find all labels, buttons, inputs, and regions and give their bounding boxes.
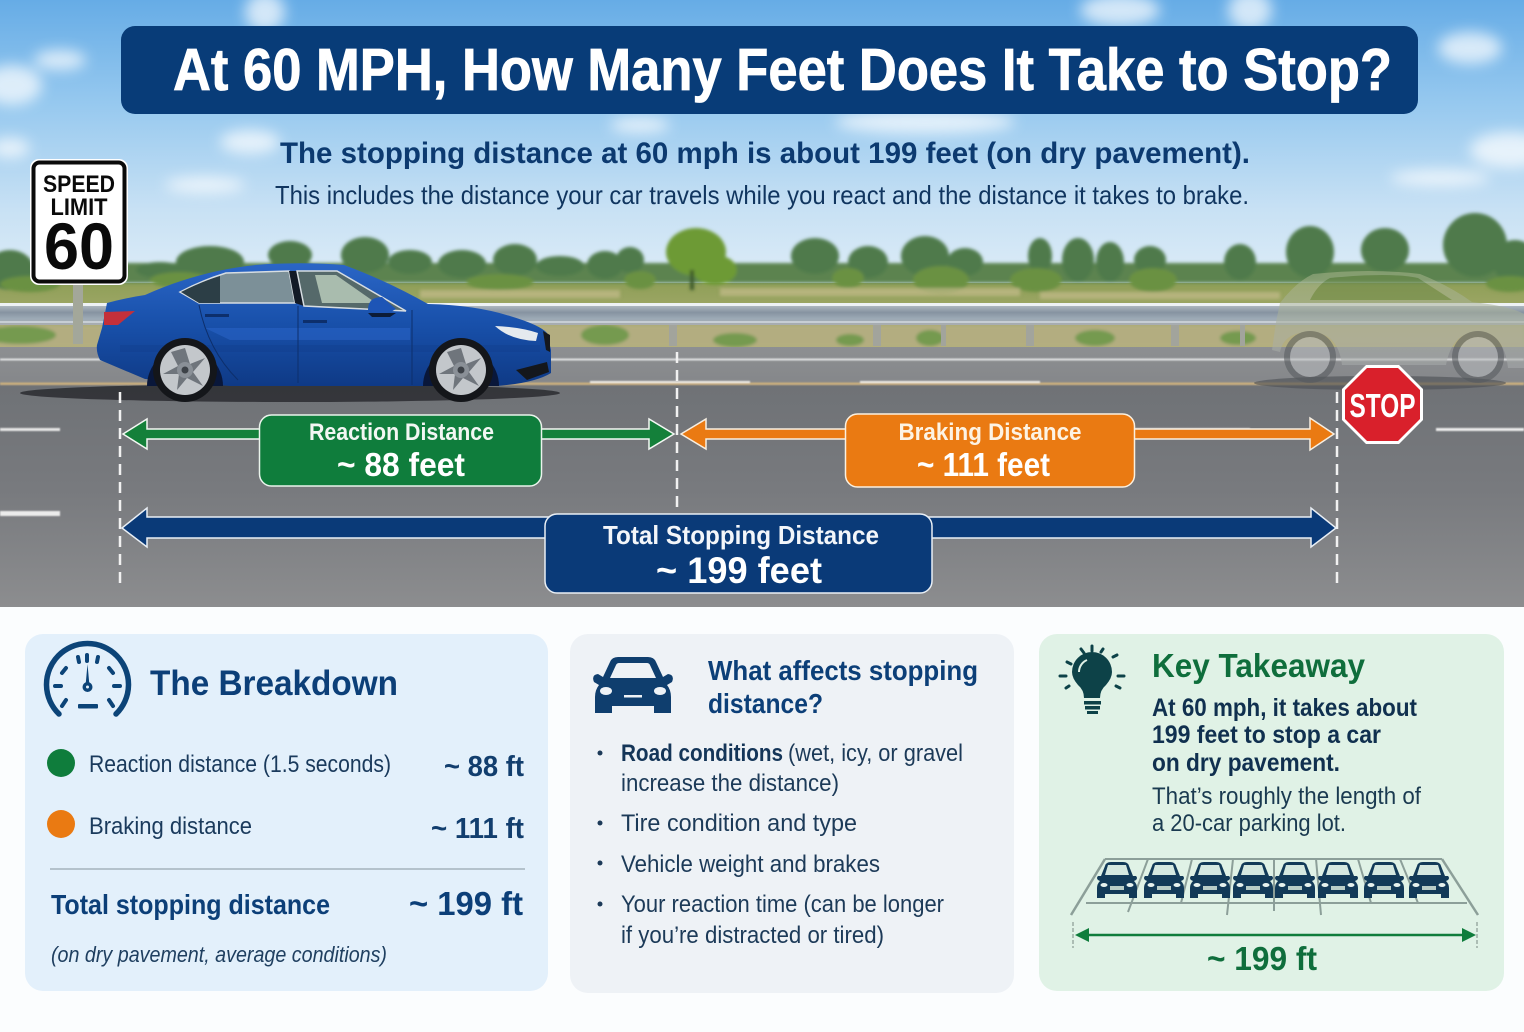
row: braking distance: Braking distance bbox=[89, 813, 252, 840]
heading: what affects stopping distance bbox=[708, 655, 978, 719]
speed limit sign: 60 bbox=[44, 209, 114, 283]
reaction distance arrow and label bbox=[123, 415, 674, 486]
bullet list: increase the distance) bbox=[621, 770, 839, 797]
takeaway text: a 20-car parking lot. bbox=[1152, 810, 1346, 837]
heading: key takeaway: Key Takeaway bbox=[1152, 647, 1366, 684]
ghost car at stopping point bbox=[1254, 271, 1524, 390]
row: reaction distance: Reaction distance (1.5 seconds) bbox=[89, 751, 391, 778]
row: braking distance: ~ 111 ft bbox=[431, 813, 524, 845]
blue car bbox=[20, 263, 560, 402]
page background bbox=[0, 607, 1524, 1032]
bullet list: if you’re distracted or tired) bbox=[621, 922, 884, 949]
takeaway text: That’s roughly the length of bbox=[1152, 783, 1421, 810]
stop sign: STOP bbox=[1350, 387, 1416, 424]
photo scene: sky, trees and road bbox=[0, 0, 1524, 607]
subtitle: This includes the distance your car travels while you react and the distance it takes to brake. bbox=[275, 180, 1249, 210]
icon: car front bbox=[593, 657, 673, 713]
row: reaction distance: ~ 88 ft bbox=[444, 751, 524, 783]
row: total stopping distance: Total stopping distance bbox=[51, 889, 330, 920]
bullet list: Vehicle weight and brakes bbox=[621, 851, 880, 878]
note: (on dry pavement, average conditions) bbox=[51, 942, 387, 967]
reaction distance arrow and label: Reaction Distance bbox=[309, 419, 494, 446]
takeaway text: 199 feet to stop a car bbox=[1152, 721, 1381, 749]
length label: ~ 199 ft bbox=[1207, 940, 1317, 977]
total stopping distance arrow and label: Total Stopping Distance bbox=[603, 520, 879, 550]
panel: what affects stopping distance bbox=[570, 634, 1014, 993]
dashed distance markers bbox=[120, 352, 1337, 587]
takeaway text bbox=[1152, 694, 1421, 837]
icon: speedometer bbox=[46, 644, 128, 714]
heading: what affects stopping distance: What affects stopping bbox=[708, 655, 978, 686]
panel: the breakdown bbox=[25, 634, 548, 991]
subtitle: The stopping distance at 60 mph is about 199 feet (on dry pavement). bbox=[280, 137, 1250, 170]
stop sign bbox=[1342, 365, 1423, 444]
takeaway text: on dry pavement. bbox=[1152, 749, 1340, 777]
speed limit sign bbox=[30, 159, 128, 344]
takeaway text: At 60 mph, it takes about bbox=[1152, 694, 1418, 722]
parking lot illustration bbox=[1071, 859, 1478, 915]
heading: the breakdown: The Breakdown bbox=[150, 664, 398, 703]
bullet list bbox=[598, 740, 963, 949]
total stopping distance arrow and label bbox=[122, 508, 1336, 593]
bullet list: Tire condition and type bbox=[621, 810, 857, 837]
subtitle bbox=[275, 137, 1250, 210]
reaction distance arrow and label: ~ 88 feet bbox=[337, 446, 465, 483]
speed limit sign: LIMIT bbox=[50, 194, 108, 221]
speed limit sign: SPEED bbox=[43, 171, 115, 198]
row: total stopping distance: ~ 199 ft bbox=[409, 885, 523, 922]
icon: light bulb bbox=[1060, 646, 1124, 714]
total stopping distance arrow and label: ~ 199 feet bbox=[656, 550, 822, 591]
bullet list: Your reaction time (can be longer bbox=[621, 891, 944, 918]
heading: what affects stopping distance: distance? bbox=[708, 688, 823, 719]
row: braking distance bbox=[47, 810, 524, 845]
row: total stopping distance bbox=[51, 885, 523, 922]
braking distance arrow and label: Braking Distance bbox=[898, 419, 1082, 446]
title banner: At 60 MPH, How Many Feet Does It Take to Stop? bbox=[173, 37, 1392, 103]
braking distance arrow and label: ~ 111 feet bbox=[917, 446, 1050, 483]
row: reaction distance bbox=[47, 749, 524, 783]
braking distance arrow and label bbox=[681, 414, 1334, 487]
length arrow bbox=[1073, 922, 1477, 948]
bullet list: Road conditions bbox=[621, 740, 783, 767]
bullet list: (wet, icy, or gravel bbox=[788, 740, 963, 767]
panel: key takeaway bbox=[1039, 634, 1504, 991]
title banner bbox=[121, 26, 1418, 114]
